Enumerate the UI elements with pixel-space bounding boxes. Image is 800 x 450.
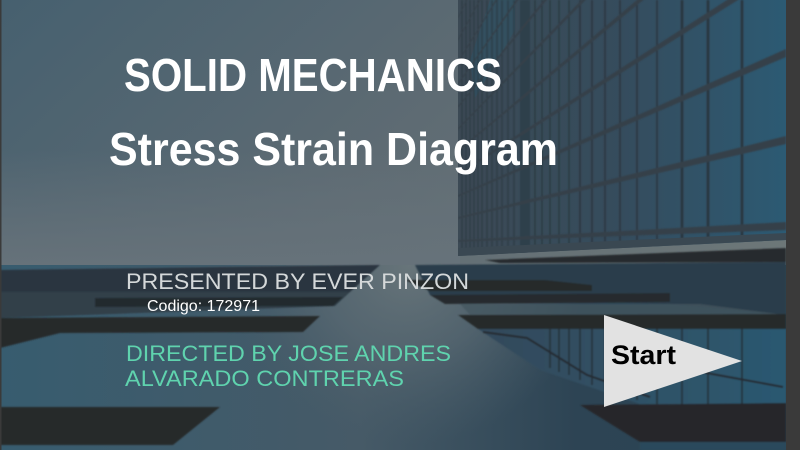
title line 2: Stress Strain Diagram — [109, 123, 558, 175]
student code: Codigo: 172971 — [147, 298, 260, 315]
title line 1: SOLID MECHANICS — [124, 49, 502, 101]
start button arrow: Start — [611, 340, 676, 370]
director: ALVARADO CONTRERAS — [125, 366, 404, 391]
director — [125, 341, 451, 391]
left edge strip — [0, 0, 2, 450]
director: DIRECTED BY JOSE ANDRES — [126, 341, 451, 366]
start button arrow — [604, 315, 742, 407]
title — [109, 49, 558, 175]
right edge strip — [786, 0, 800, 450]
building facade — [458, 0, 786, 260]
presenter: PRESENTED BY EVER PINZON — [126, 269, 469, 294]
ground and reflections — [0, 248, 786, 450]
